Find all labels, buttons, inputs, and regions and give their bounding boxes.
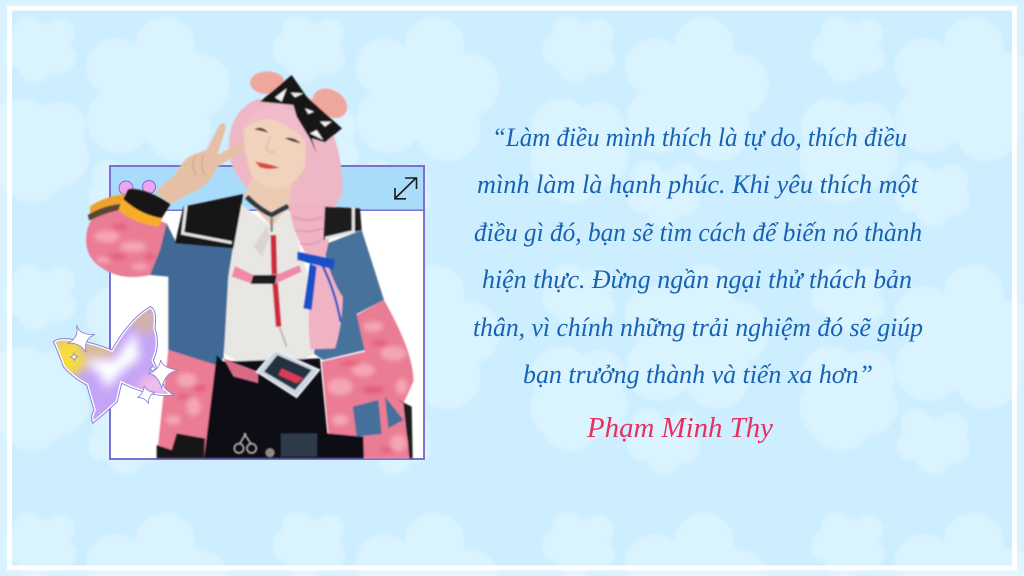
choker [247, 197, 288, 215]
bangs [244, 116, 308, 141]
pink camouflage [94, 224, 408, 453]
face [244, 119, 306, 184]
quote text: mình làm là hạnh phúc. Khi yêu thích một [477, 170, 919, 199]
window panel [110, 166, 424, 459]
jacket back [150, 223, 233, 365]
butterfly sticker [52, 306, 178, 424]
yellow wing tint [48, 338, 88, 375]
neck [244, 175, 292, 227]
window title bar [111, 167, 423, 210]
braid and lower hair [288, 203, 343, 349]
sparkles [67, 325, 178, 403]
arm and hand [155, 123, 244, 204]
right sleeve and lower right panel [322, 300, 413, 458]
blue pocket [353, 400, 382, 437]
chest strap [232, 265, 302, 284]
quote text [473, 123, 923, 389]
white glow [83, 332, 140, 388]
shirt [224, 203, 314, 365]
ears [249, 70, 348, 120]
scissors and tools [234, 433, 317, 457]
waist and badge details [223, 350, 319, 457]
hair back [229, 98, 343, 210]
portrait illustration [86, 71, 413, 458]
author name: Phạm Minh Thy [586, 412, 773, 444]
blue ribbon [297, 252, 335, 310]
sailor collar [175, 194, 243, 248]
lanyard [273, 235, 279, 327]
hair bow [260, 75, 342, 153]
quote text: hiện thực. Đừng ngần ngại thử thách bản [482, 265, 912, 294]
icon: expand arrows [395, 178, 416, 199]
left sleeve [86, 207, 167, 277]
eyes and mouth [254, 128, 301, 169]
lower left pink panel [157, 350, 216, 458]
quote text: thân, vì chính những trải nghiệm đó sẽ giúp [473, 313, 923, 342]
quote text: bạn trưởng thành và tiến xa hơn” [523, 360, 873, 389]
black cuff [118, 189, 171, 220]
orange cuff [90, 194, 130, 217]
ID badge [257, 350, 319, 397]
quote text: “Làm điều mình thích là tự do, thích điều [492, 123, 907, 152]
skirt [204, 355, 364, 458]
quote text: điều gì đó, bạn sẽ tìm cách để biến nó thành [474, 218, 922, 247]
window buttons [119, 180, 156, 195]
